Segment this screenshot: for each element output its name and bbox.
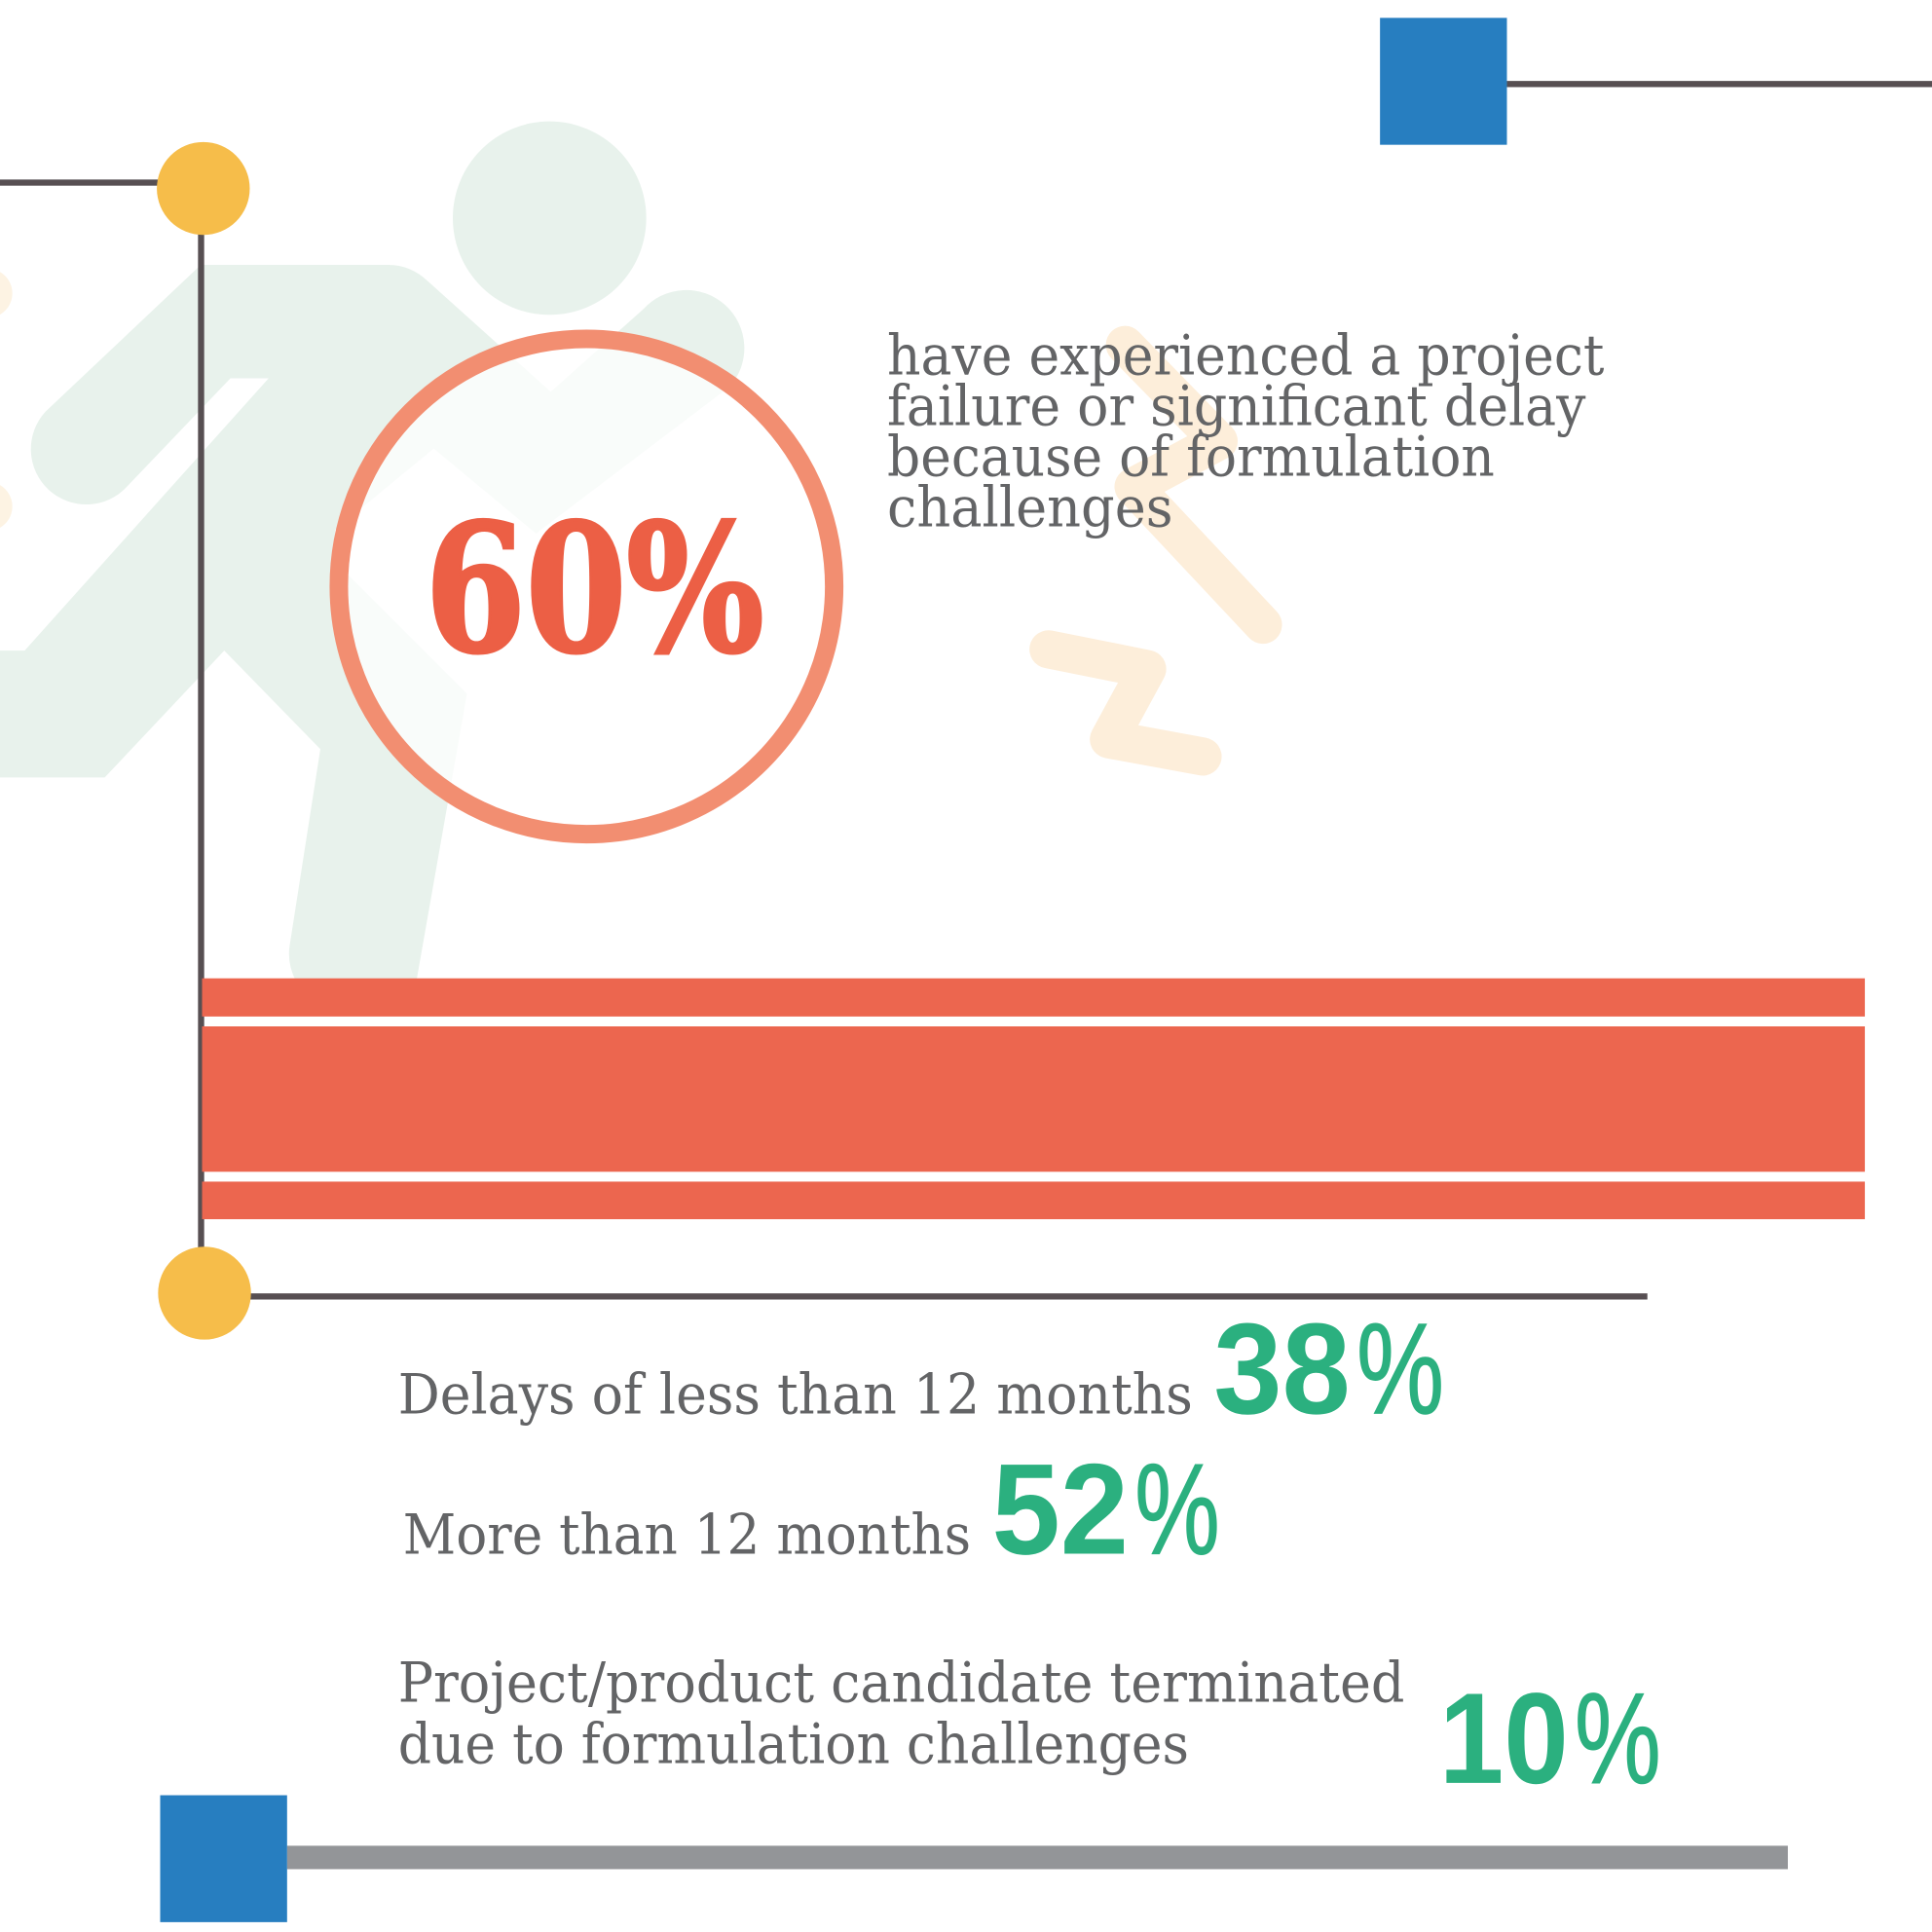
bottom blue square with gray bar <box>160 1796 1788 1922</box>
row: project terminated: % <box>1575 1667 1661 1811</box>
row: project terminated: Project/product candidate terminated <box>398 1651 1404 1715</box>
decorative faint orange dots <box>0 269 13 531</box>
row: more than 12 months: 52 <box>992 1438 1129 1582</box>
headline description: challenges <box>887 475 1173 539</box>
top blue square connector <box>1380 18 1932 145</box>
row: more than 12 months <box>403 1438 1220 1582</box>
row: delays under 12 months: 38 <box>1213 1297 1351 1441</box>
background running figure <box>0 122 744 981</box>
yellow node bottom <box>158 1246 251 1340</box>
row: project terminated: 10 <box>1439 1667 1569 1811</box>
headline description: because of formulation <box>887 425 1495 489</box>
headline description: have experienced a project <box>887 324 1605 389</box>
timeline connector lines <box>0 179 1648 1300</box>
headline description <box>887 324 1605 539</box>
row: project terminated <box>398 1651 1661 1811</box>
yellow node top <box>157 142 249 235</box>
row: more than 12 months: More than 12 months <box>403 1504 971 1568</box>
row: delays under 12 months <box>398 1297 1444 1441</box>
headline description: failure or significant delay <box>887 375 1585 439</box>
stat circle 60% <box>339 339 835 835</box>
row: project terminated: due to formulation challenges <box>398 1713 1189 1777</box>
stat circle 60%: 60% <box>426 485 763 692</box>
row: delays under 12 months: Delays of less than 12 months <box>398 1362 1193 1427</box>
row: delays under 12 months: % <box>1356 1297 1444 1441</box>
decorative orange zigzags <box>1049 345 1263 757</box>
red banner stripes <box>203 979 1865 1219</box>
row: more than 12 months: % <box>1134 1438 1220 1582</box>
